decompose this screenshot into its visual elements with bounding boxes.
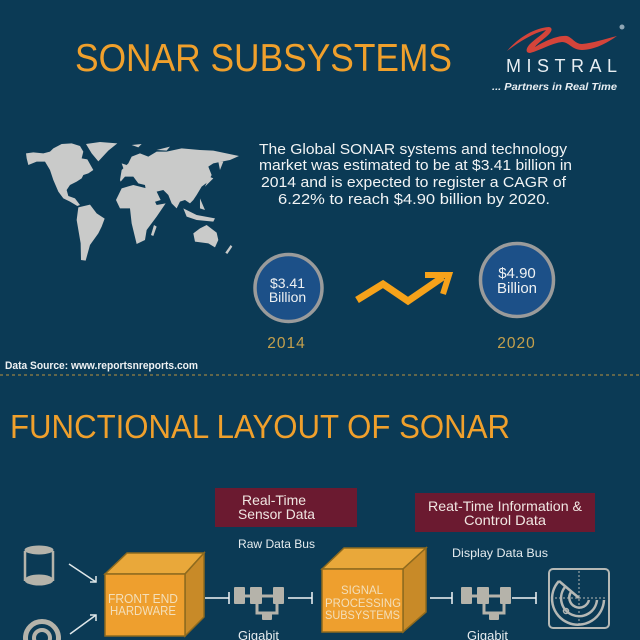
value circle 2020: [480, 244, 554, 316]
arrow: cylinder to front end: [69, 564, 96, 582]
cube: signal processing subsystems: SUBSYSTEMS: [325, 608, 400, 622]
year 2020: 2020: [497, 335, 536, 352]
data source: Data Source: www.reportsnreports.com: [5, 360, 198, 372]
label: real-time sensor data: [215, 488, 357, 527]
growth arrow: [357, 275, 449, 301]
cube: signal processing subsystems: SIGNAL: [341, 583, 383, 597]
cube: signal processing subsystems: PROCESSING: [325, 596, 401, 610]
value circle 2020: Billion: [497, 280, 537, 297]
cube: front end hardware: FRONT END: [108, 592, 178, 606]
section heading: FUNCTIONAL LAYOUT OF SONAR: [10, 409, 510, 446]
British Isles and Arctic islands: [122, 144, 170, 170]
logo: Mistral: [492, 24, 624, 93]
market description: 2014 and is expected to register a CAGR of: [261, 175, 567, 191]
Eurasia: [120, 148, 239, 208]
label: real-time information and control data: Control Data: [464, 512, 546, 528]
icon: gigabit switch 1: [234, 587, 284, 620]
display data bus label: Display Data Bus: [452, 546, 548, 560]
logo: Mistral: MISTRAL: [506, 56, 617, 76]
logo: Mistral: ... Partners in Real Time: [492, 81, 617, 93]
label: real-time information and control data: [415, 493, 595, 532]
label: real-time sensor data: Real-Time: [242, 492, 306, 508]
label: real-time information and control data: Reat-Time Information &: [428, 498, 583, 514]
Southeast Asia islands: [183, 162, 223, 222]
arrow: front end to bus: [205, 592, 229, 604]
arrow: bus to signal processing: [288, 592, 312, 604]
value circle 2020: $4.90: [498, 265, 536, 282]
arrow: signal processing to bus: [430, 592, 452, 604]
icon: ring sensor: [26, 622, 58, 640]
icon: radar display: [549, 569, 609, 628]
icon: gigabit switch 2: [461, 587, 511, 620]
arrow: bus to display: [512, 592, 536, 604]
value circle 2014: [255, 254, 322, 322]
market description: [259, 142, 572, 208]
arrow: ring to front end: [70, 615, 96, 634]
Australia: [193, 225, 218, 247]
market description: market was estimated to be at $3.41 billion in: [259, 158, 572, 174]
title: SONAR SUBSYSTEMS: [75, 37, 452, 80]
cube: front end hardware: [105, 553, 204, 636]
label: real-time sensor data: Sensor Data: [238, 506, 315, 522]
market description: 6.22% to reach $4.90 billion by 2020.: [278, 192, 550, 208]
South America: [77, 205, 105, 261]
value circle 2014: Billion: [269, 289, 306, 305]
value circle 2014: $3.41: [270, 275, 305, 291]
Africa: [116, 185, 166, 244]
Greenland: [86, 142, 117, 161]
market description: The Global SONAR systems and technology: [259, 142, 568, 158]
Madagascar and New Zealand: [151, 225, 232, 254]
year 2014: 2014: [267, 335, 306, 352]
cube: signal processing subsystems: [322, 548, 426, 632]
world map: [26, 142, 239, 261]
icon: cylinder sensor: [24, 546, 54, 586]
cube: front end hardware: HARDWARE: [110, 604, 176, 618]
raw data bus label: Raw Data Bus: [238, 537, 315, 551]
North America: [26, 143, 93, 206]
